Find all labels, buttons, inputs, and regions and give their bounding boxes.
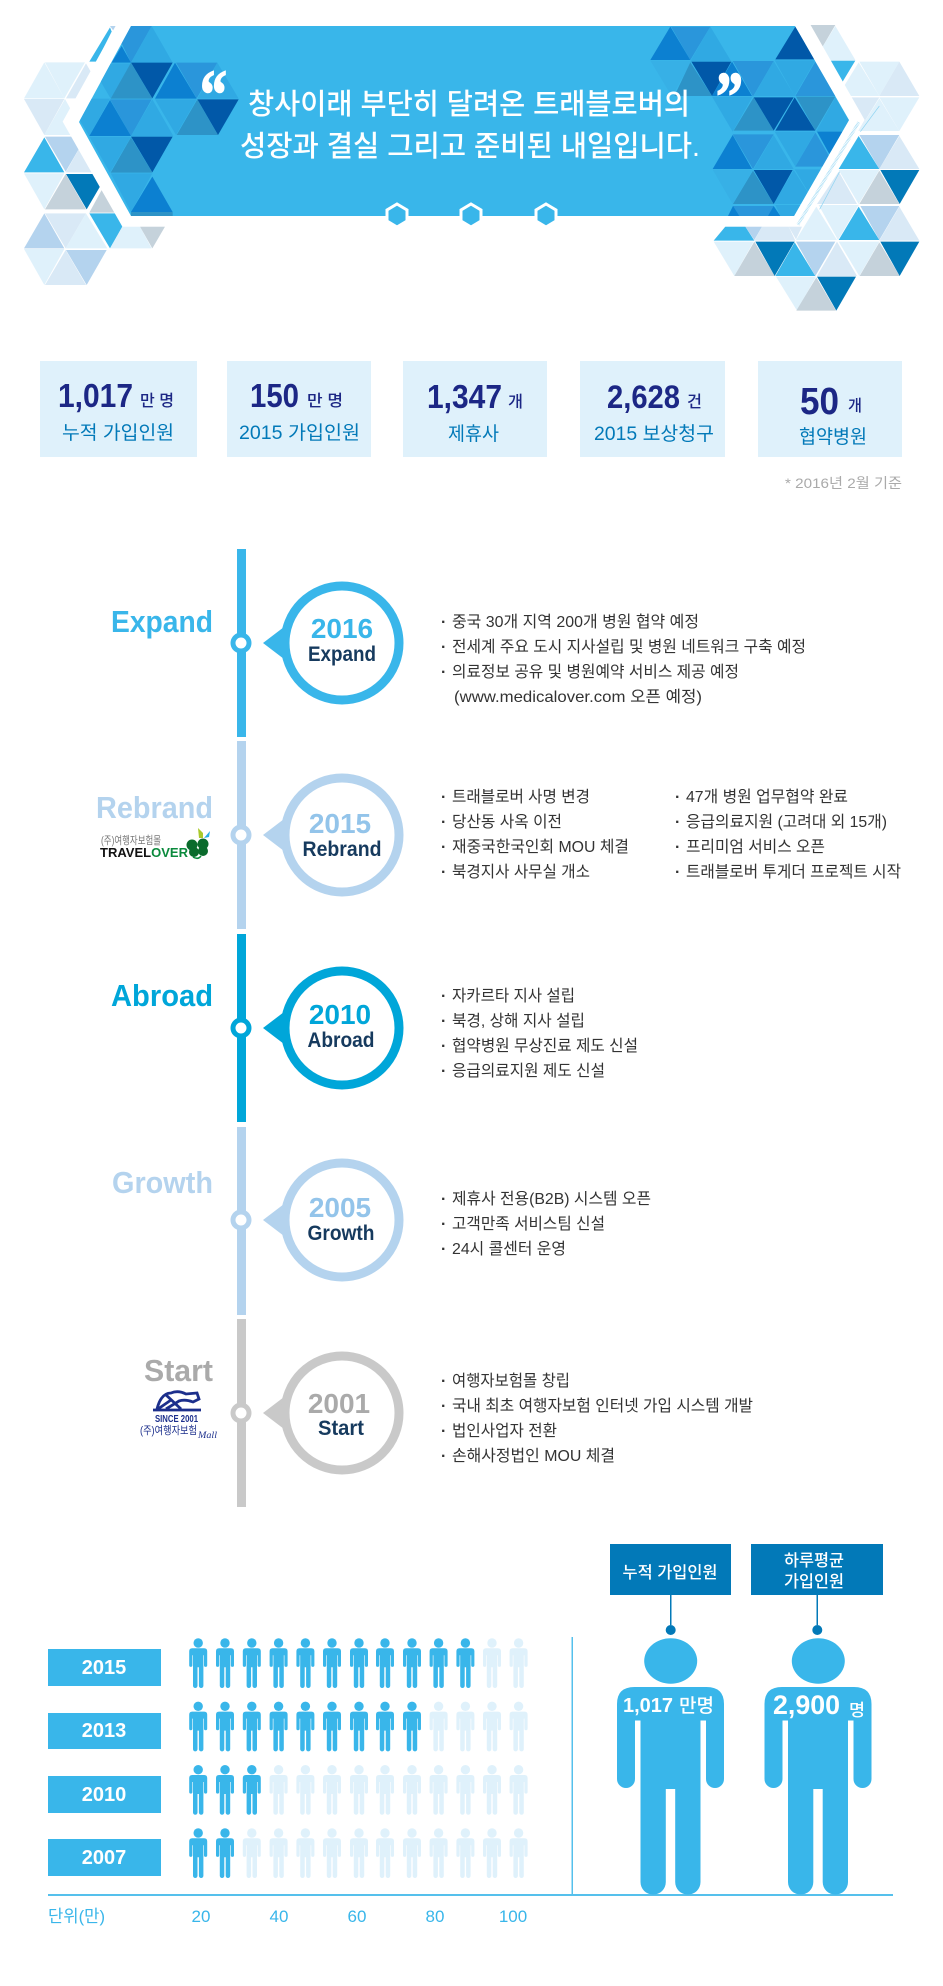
footnote: * 2016년 2월 기준 xyxy=(785,475,902,491)
stat: claims: 건 xyxy=(687,393,702,411)
bullet list 2015: 트래블로버 사명 변경 xyxy=(452,788,590,806)
logo: travel insurance mall: SINCE 2001 xyxy=(155,1414,198,1425)
large figure: daily: 2,900 xyxy=(773,1690,840,1720)
bullet list 2016: · xyxy=(441,664,446,681)
timeline: 2001 Start: 2001 xyxy=(308,1388,370,1419)
axis labels: 100 xyxy=(499,1907,527,1926)
bullet list 2016: 전세계 주요 도시 지사설립 및 병원 네트워크 구축 예정 xyxy=(452,638,806,656)
stat: hospitals: 개 xyxy=(848,397,862,415)
stats row xyxy=(40,361,902,491)
bullet list 2015: · xyxy=(675,839,680,856)
bullet list 2015: · xyxy=(441,864,446,881)
closing quote mark: ” xyxy=(716,59,743,136)
row 2013 xyxy=(48,1702,528,1751)
callout: daily members: 하루평균 xyxy=(784,1551,844,1570)
bullet list 2016: 중국 30개 지역 200개 병원 협약 예정 xyxy=(452,613,699,631)
timeline: 2005 Growth: Growth xyxy=(308,1222,374,1245)
callout: daily members xyxy=(751,1544,883,1635)
logo: Travelover: (주)여행자보험몰 xyxy=(101,834,161,847)
bullet list 2015: · xyxy=(441,814,446,831)
axis labels: 20 xyxy=(192,1907,210,1926)
timeline: 2001 Start xyxy=(140,1319,753,1507)
stat: claims: 2015 보상청구 xyxy=(594,423,714,445)
timeline: 2016 Expand: 2016 xyxy=(311,613,373,644)
bullet list 2015: · xyxy=(441,789,446,806)
timeline: 2015 Rebrand xyxy=(96,741,901,929)
stat: cumulative members: 1,017 xyxy=(58,377,133,414)
bullet list 2015: 북경지사 사무실 개소 xyxy=(452,863,590,881)
timeline: 2016 Expand xyxy=(111,549,806,737)
right triangle cluster xyxy=(712,23,919,311)
stat: cumulative members: 만 명 xyxy=(140,392,174,410)
axis labels: 40 xyxy=(270,1907,288,1926)
bullet list 2001: · xyxy=(441,1448,446,1465)
bullet list 2005: 24시 콜센터 운영 xyxy=(452,1240,566,1258)
bullet list 2010 xyxy=(441,987,638,1080)
title: 성장과 결실 그리고 준비된 내일입니다. xyxy=(240,130,700,163)
bullet list 2005 xyxy=(441,1190,651,1258)
timeline: 2015 Rebrand: Rebrand xyxy=(96,790,213,825)
bullet list 2015: · xyxy=(441,839,446,856)
bullet list 2010: · xyxy=(441,988,446,1005)
bullet list 2016 xyxy=(441,613,806,706)
logo: Travelover: TRAVELOVER xyxy=(100,845,189,860)
timeline: 2015 Rebrand: Rebrand xyxy=(302,838,382,861)
hexagon markers xyxy=(387,204,556,227)
stat: partners: 개 xyxy=(508,393,523,411)
bullet list 2001: · xyxy=(441,1423,446,1440)
timeline: 2010 Abroad xyxy=(111,934,638,1122)
bullet list 2015: 트래블로버 투게더 프로젝트 시작 xyxy=(686,863,901,881)
large figure: cumulative: 1,017 xyxy=(623,1695,673,1717)
bullet list 2005: · xyxy=(441,1191,446,1208)
title xyxy=(240,88,700,163)
bullet list 2005: 제휴사 전용(B2B) 시스템 오픈 xyxy=(452,1190,651,1208)
bullet list 2016: · xyxy=(441,614,446,631)
stat: 2015 members: 150 xyxy=(250,377,299,414)
bullet list 2016: 의료정보 공유 및 병원예약 서비스 제공 예정 xyxy=(452,663,739,681)
stat: claims: 2,628 xyxy=(607,379,680,415)
title: 창사이래 부단히 달려온 트래블로버의 xyxy=(248,88,690,121)
callout: cumulative members: 누적 가입인원 xyxy=(622,1563,718,1582)
banner inner triangles xyxy=(67,26,855,216)
timeline: 2001 Start: Start xyxy=(144,1353,213,1388)
pictogram chart: members by year xyxy=(48,1638,528,1926)
bullet list 2001: 손해사정법인 MOU 체결 xyxy=(452,1447,615,1465)
bullet list 2015: 프리미엄 서비스 오픈 xyxy=(686,838,825,856)
timeline: 2005 Growth: 2005 xyxy=(309,1192,371,1223)
row 2007 xyxy=(48,1828,528,1878)
bullet list 2015: · xyxy=(675,814,680,831)
logo: travel insurance mall: (주)여행자보험 xyxy=(140,1424,197,1437)
axis labels xyxy=(48,1907,527,1926)
banner background xyxy=(79,26,849,216)
row 2010 xyxy=(48,1765,528,1815)
stat: 2015 members: 만 명 xyxy=(307,392,343,410)
stat: claims xyxy=(580,361,725,457)
logo: Travelover xyxy=(100,828,210,860)
bullet list 2015: · xyxy=(675,864,680,881)
bullet list 2001: 국내 최초 여행자보험 인터넷 가입 시스템 개발 xyxy=(452,1397,753,1415)
timeline: 2005 Growth xyxy=(112,1127,651,1315)
stat: cumulative members xyxy=(40,361,197,457)
row 2015: 2015 xyxy=(82,1657,126,1679)
bullet list 2001: 법인사업자 전환 xyxy=(452,1422,557,1440)
timeline: 2010 Abroad: 2010 xyxy=(309,999,371,1030)
bullet list 2005: · xyxy=(441,1241,446,1258)
stat: partners: 1,347 xyxy=(427,378,502,415)
timeline: 2010 Abroad: Abroad xyxy=(308,1029,374,1052)
stat: 2015 members xyxy=(227,361,371,457)
bullet list 2015 xyxy=(441,788,901,881)
opening quote mark: “ xyxy=(200,57,227,134)
callout: daily members: 가입인원 xyxy=(784,1572,844,1591)
bullet list 2001: 여행자보험몰 창립 xyxy=(452,1372,570,1390)
bullet list 2016: · xyxy=(441,639,446,656)
left triangle cluster xyxy=(24,23,173,285)
row 2007: 2007 xyxy=(82,1847,126,1869)
bullet list 2005: 고객만족 서비스팀 신설 xyxy=(452,1215,605,1233)
timeline: 2016 Expand: Expand xyxy=(111,604,213,639)
bullet list 2010: 응급의료지원 제도 신설 xyxy=(452,1062,605,1080)
bullet list 2001 xyxy=(441,1372,753,1465)
timeline: 2005 Growth: Growth xyxy=(112,1165,213,1200)
axis labels: 단위(만) xyxy=(48,1907,105,1926)
stat: partners: 제휴사 xyxy=(448,423,499,445)
stat: hospitals: 50 xyxy=(800,381,839,423)
logo: travel insurance mall: Mall xyxy=(197,1430,218,1440)
logo: travel insurance mall xyxy=(140,1392,218,1440)
timeline: 2001 Start: Start xyxy=(318,1417,364,1440)
bullet list 2010: · xyxy=(441,1013,446,1030)
stat: partners xyxy=(403,361,547,457)
large figure: daily: 명 xyxy=(849,1701,865,1720)
bullet list 2010: · xyxy=(441,1063,446,1080)
bullet list 2010: · xyxy=(441,1038,446,1055)
timeline: 2010 Abroad: Abroad xyxy=(111,978,213,1013)
bullet list 2015: · xyxy=(675,789,680,806)
bullet list 2015: 47개 병원 업무협약 완료 xyxy=(686,788,848,806)
timeline: 2015 Rebrand: 2015 xyxy=(309,808,371,839)
row 2010: 2010 xyxy=(82,1784,126,1806)
large figure: daily xyxy=(764,1638,872,1895)
bullet list 2015: 재중국한국인회 MOU 체결 xyxy=(452,838,629,856)
bullet list 2015: 당산동 사옥 이전 xyxy=(452,813,562,831)
axis labels: 80 xyxy=(426,1907,444,1926)
stat: cumulative members: 누적 가입인원 xyxy=(62,422,174,444)
axis labels: 60 xyxy=(348,1907,366,1926)
stat: hospitals xyxy=(758,361,902,457)
bullet list 2005: · xyxy=(441,1216,446,1233)
bullet list 2010: 자카르타 지사 설립 xyxy=(452,987,575,1005)
stat: 2015 members: 2015 가입인원 xyxy=(239,422,360,444)
bullet list 2001: · xyxy=(441,1373,446,1390)
row 2013: 2013 xyxy=(82,1720,126,1742)
bullet list 2010: 북경, 상해 지사 설립 xyxy=(452,1012,585,1030)
timeline: 2016 Expand: Expand xyxy=(308,643,376,666)
callout: cumulative members xyxy=(610,1544,731,1635)
axis and divider lines xyxy=(48,1637,893,1896)
bullet list 2010: 협약병원 무상진료 제도 신설 xyxy=(452,1037,638,1055)
bullet list 2016: (www.medicalover.com 오픈 예정) xyxy=(454,688,702,706)
header banner xyxy=(24,23,919,311)
row 2015 xyxy=(48,1638,528,1688)
large figure: cumulative xyxy=(617,1638,724,1895)
bullet list 2001: · xyxy=(441,1398,446,1415)
large figure: cumulative: 만명 xyxy=(679,1695,714,1717)
bullet list 2015: 응급의료지원 (고려대 외 15개) xyxy=(686,813,887,831)
stat: hospitals: 협약병원 xyxy=(799,426,867,448)
